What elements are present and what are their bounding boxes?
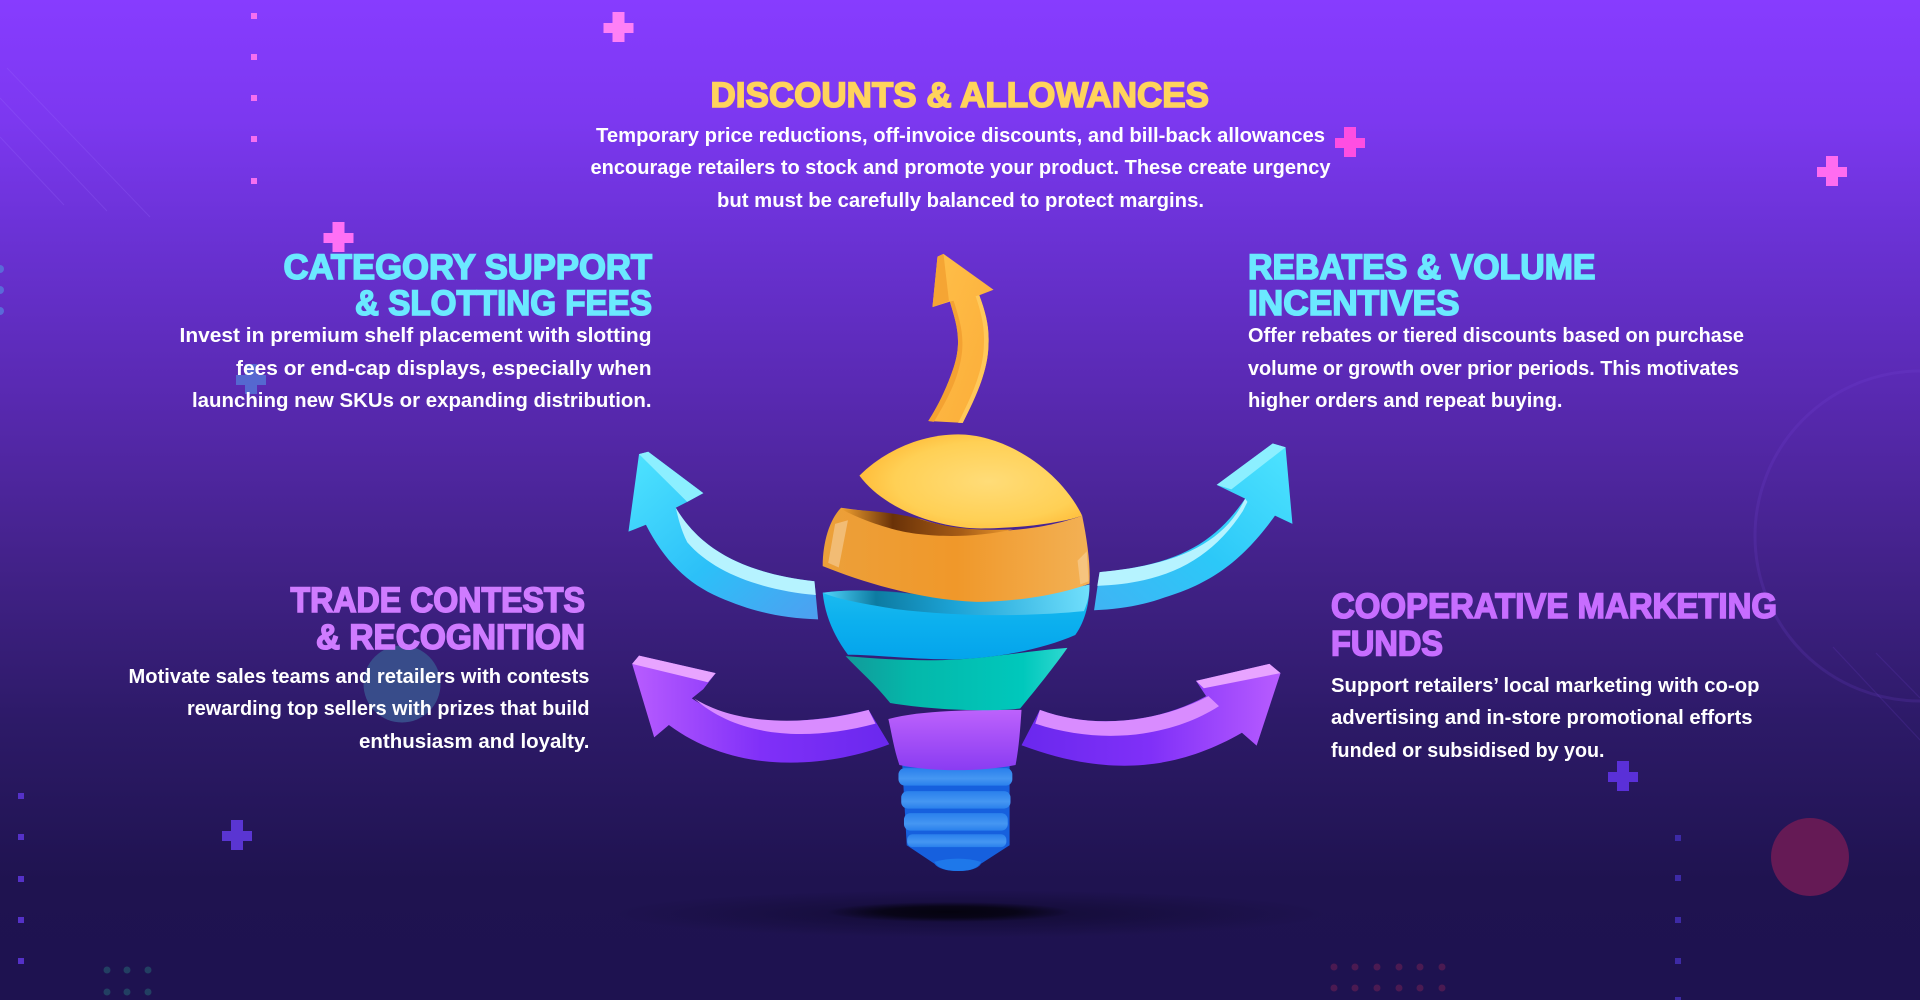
arrow: purple lower left [632,656,889,763]
text: rebates and volume incentives: Offer rebates or tiered discounts based on purchase [1248,324,1744,347]
text: discounts and allowances [590,124,1331,212]
text: rebates and volume incentives: volume or growth over prior periods. This motivates [1248,357,1739,380]
decorative pink squares column [251,13,257,184]
heading: category support and slotting fees: CATEGORY SUPPORT [284,248,652,287]
text: trade contests and recognition: rewarding top sellers with prizes that build [187,697,590,720]
heading: rebates and volume incentives [1248,248,1596,323]
plus icon 5 [236,364,266,394]
heading: discounts and allowances: DISCOUNTS & ALLOWANCES [710,76,1209,115]
bulb teal slice [846,648,1067,710]
decorative teal dot grid [104,966,152,996]
lightbulb illustration with arrows [628,254,1292,871]
plus icon 1 [604,12,634,42]
plus icon 3 [1817,156,1847,186]
heading: category support and slotting fees [284,248,652,323]
plus icon 6 [222,820,252,850]
ground shadow [610,890,1330,938]
text: rebates and volume incentives [1248,324,1744,412]
arrow: cyan upper right [1094,444,1292,610]
bulb orange slice [823,508,1090,602]
plus icon 4 [324,222,354,252]
text: cooperative marketing funds [1331,674,1760,762]
text: rebates and volume incentives: higher orders and repeat buying. [1248,389,1562,412]
text: cooperative marketing funds: advertising and in-store promotional efforts [1331,706,1752,729]
bulb purple collar [888,710,1022,770]
heading: trade contests and recognition: TRADE CONTESTS [290,581,585,620]
plus icon 7 [1608,761,1638,791]
text: category support and slotting fees [180,324,652,412]
text: trade contests and recognition: enthusiasm and loyalty. [359,730,590,753]
heading: cooperative marketing funds: FUNDS [1331,624,1443,664]
heading: cooperative marketing funds [1331,587,1777,664]
decorative purple squares column left [18,793,24,964]
decorative red dot grid [1330,964,1446,992]
arrow: cyan upper left [628,452,818,619]
decorative purple squares column right [1675,835,1681,1000]
heading: trade contests and recognition [290,581,585,657]
decorative red circle [1771,818,1849,896]
text: cooperative marketing funds: Support retailers’ local marketing with co-op [1331,674,1760,697]
text: discounts and allowances: encourage retailers to stock and promote your product. These create urgency [590,156,1331,179]
text: category support and slotting fees: fees or end-cap displays, especially when [236,357,652,380]
text: category support and slotting fees: launching new SKUs or expanding distribution. [192,389,652,412]
text: trade contests and recognition: Motivate sales teams and retailers with contests [128,665,590,688]
decorative blue circle [364,646,440,722]
decorative dots left edge [0,265,4,315]
heading: trade contests and recognition: & RECOGNITION [316,618,585,657]
text: cooperative marketing funds: funded or subsidised by you. [1331,739,1604,762]
arrow: purple lower right [1022,664,1281,766]
text: discounts and allowances: but must be carefully balanced to protect margins. [717,189,1204,212]
bulb screw base [898,763,1012,871]
arrow: orange up [928,254,994,423]
text: discounts and allowances: Temporary price reductions, off-invoice discounts, and bill-back allowances [596,124,1325,147]
text: category support and slotting fees: Invest in premium shelf placement with slotting [180,324,652,347]
decorative ring and lines: right [1755,371,1920,740]
heading: rebates and volume incentives: REBATES & VOLUME [1248,248,1596,287]
text: trade contests and recognition [128,665,590,753]
decorative diagonal lines: top left [0,68,150,217]
heading: rebates and volume incentives: INCENTIVES [1248,284,1460,323]
heading: category support and slotting fees: & SLOTTING FEES [355,284,652,323]
heading: cooperative marketing funds: COOPERATIVE MARKETING [1331,587,1777,626]
plus icon 2 [1335,127,1365,157]
bulb yellow dome [859,434,1082,528]
bulb blue slice [823,584,1089,659]
